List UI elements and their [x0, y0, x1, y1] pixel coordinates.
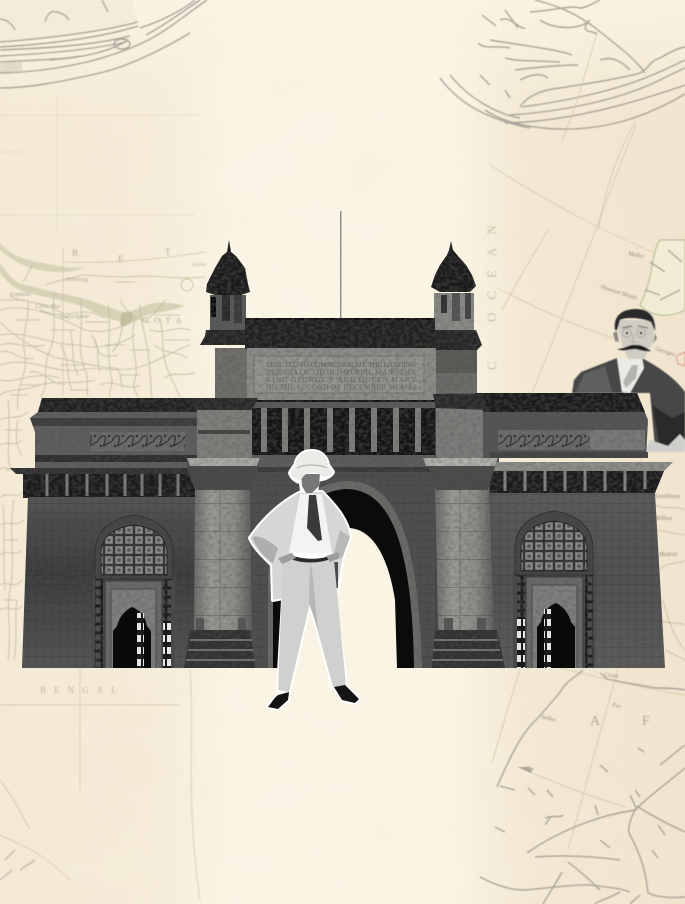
map: ocean label and grid lines on the right: Madrid	[658, 552, 678, 558]
map: bottom-right Africa	[480, 668, 685, 904]
moustache	[617, 345, 651, 351]
hand and cuff	[645, 434, 685, 452]
central colonnade and wall	[250, 400, 435, 668]
left wing	[10, 398, 205, 668]
portrait: moustached man behind the gate	[572, 309, 685, 452]
map: ocean label and grid lines on the right: Bilboa	[656, 516, 672, 522]
right column	[423, 394, 505, 668]
arch ring	[268, 481, 422, 668]
map: ocean label and grid lines on the right: C	[484, 361, 499, 370]
map: ocean label and grid lines on the right: Shannon Mouth	[599, 284, 638, 302]
map: bottom-right Africa: Ceuta	[604, 672, 619, 680]
inscription: IN INDIA OF THEIR IMPERIAL MAJESTIES	[266, 368, 416, 376]
map: Bengal label, bottom-left	[0, 668, 200, 900]
inscription: ERECTED TO COMMEMORATE THE LANDING	[266, 360, 417, 369]
standing man in pith helmet	[250, 451, 359, 709]
white cut-out outline	[250, 451, 359, 709]
map: bottom-right Africa: Fez	[611, 702, 622, 710]
map: left region with rivers: T	[165, 247, 171, 257]
map: bottom-right Africa: Sallee	[540, 714, 557, 724]
map: Bengal label, bottom-left: BENGAL	[40, 685, 124, 695]
left arched window	[93, 515, 175, 675]
map: left region with rivers: Goruckpour	[60, 314, 90, 320]
map: left region with rivers: E	[118, 254, 124, 264]
map: top-left coastline	[0, 0, 207, 88]
inscription: KING GEORGE V AND QUEEN MARY	[266, 375, 417, 384]
hair	[615, 309, 655, 331]
trousers	[278, 560, 346, 692]
map: ocean label and grid lines on the right: Santillana	[655, 494, 680, 500]
face	[301, 474, 320, 493]
dark arch interior	[273, 489, 414, 668]
map: top-right coastline	[440, 0, 685, 230]
inscription: ON THE SECOND OF DECEMBER MCMXI	[266, 382, 416, 392]
map: ocean label and grid lines on the right: Mallet	[627, 251, 644, 260]
right door	[517, 603, 575, 669]
right wing	[475, 393, 673, 668]
left column	[184, 398, 260, 668]
right tower lantern and dome	[431, 241, 482, 398]
shirt	[289, 494, 332, 553]
map: bottom-right Africa: A	[590, 714, 601, 729]
map: left region with rivers: Kumaon	[9, 292, 30, 298]
shoes	[268, 692, 289, 709]
map: left region with rivers: Carla Mar	[35, 304, 62, 310]
belt	[289, 555, 333, 562]
map: left region with rivers: OOTA	[142, 316, 188, 325]
right arched window	[513, 511, 595, 671]
map: left region with rivers: Ambenag	[64, 277, 88, 283]
attic with roof band	[245, 319, 436, 402]
flagpole	[340, 211, 341, 319]
hands	[278, 553, 296, 564]
jacket	[572, 358, 685, 447]
Gateway of India monument	[10, 211, 673, 675]
necktie	[307, 495, 322, 541]
structural backing	[435, 404, 499, 630]
map: left region with rivers: B	[72, 248, 78, 258]
map: left region with rivers: Lassa	[191, 262, 206, 268]
map: ocean label and grid lines on the right: OCEAN	[484, 212, 499, 322]
left tower lantern and dome	[200, 240, 250, 398]
left door	[113, 607, 171, 673]
jacket	[250, 492, 350, 600]
map: bottom-right Africa: F	[642, 714, 650, 729]
neck and face	[616, 320, 655, 359]
shirt and tie	[617, 358, 644, 393]
map: left region with rivers	[0, 243, 206, 660]
map: ocean label and grid lines on the right: Georges	[654, 346, 676, 358]
inscription	[266, 362, 416, 390]
map: ocean label and grid lines on the right	[484, 125, 685, 660]
pith helmet	[290, 451, 333, 480]
sky visible through the central arch	[287, 528, 397, 668]
